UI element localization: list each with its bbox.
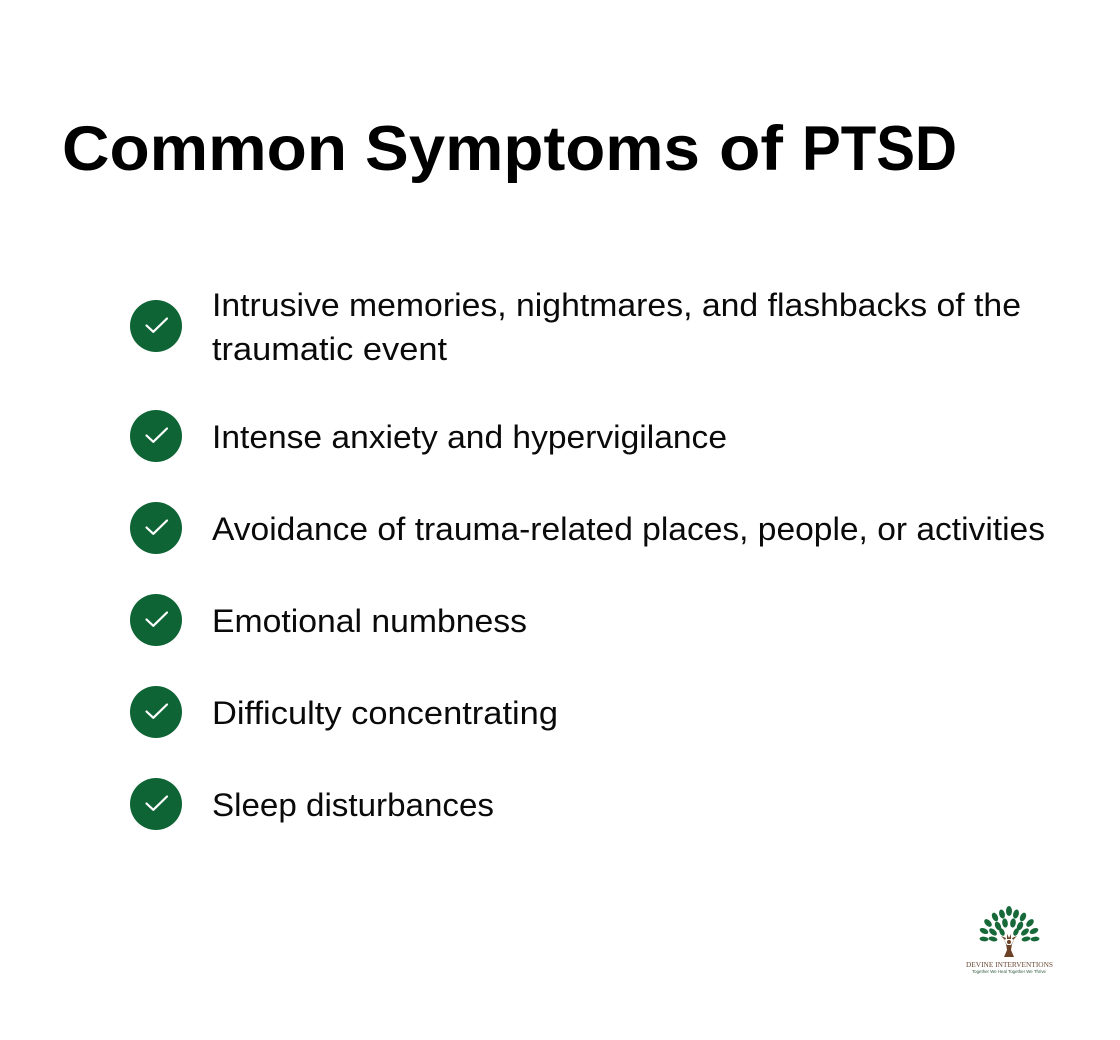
icon: check circle [130, 686, 182, 738]
item: sleep [130, 778, 494, 830]
logo tagline: Together We Heal Together We Thrive [972, 969, 1046, 974]
logo: Devine Interventions [966, 906, 1053, 974]
text: anxiety: Intense anxiety and hypervigilance [212, 419, 727, 455]
text: intrusive memories: traumatic event [212, 331, 447, 367]
item: intrusive memories [130, 287, 1021, 367]
icon: check circle [130, 594, 182, 646]
icon: check circle [130, 502, 182, 554]
icon: check circle [130, 410, 182, 462]
icon: tree [979, 906, 1040, 957]
icon: check circle [130, 778, 182, 830]
title: of [719, 114, 784, 184]
tree leaves [979, 906, 1040, 942]
text: sleep: Sleep disturbances [212, 787, 494, 823]
item: numbness [130, 594, 527, 646]
item: anxiety [130, 410, 727, 462]
logo name: DEVINE INTERVENTIONS [966, 961, 1053, 969]
item: avoidance [130, 502, 1045, 554]
title: PTSD [802, 114, 957, 184]
text: intrusive memories: Intrusive memories, nightmares, and flashbacks of the [212, 287, 1021, 323]
text: intrusive memories [212, 287, 1021, 367]
text: avoidance: Avoidance of trauma-related places, people, or activities [212, 511, 1045, 547]
text: concentrating: Difficulty concentrating [212, 695, 558, 731]
tree trunk and figure [1001, 934, 1017, 957]
title: Symptoms [365, 114, 700, 184]
item: concentrating [130, 686, 558, 738]
symptom list [130, 287, 1045, 830]
icon: check circle [130, 300, 182, 352]
text: numbness: Emotional numbness [212, 603, 527, 639]
title: Common [62, 114, 347, 184]
